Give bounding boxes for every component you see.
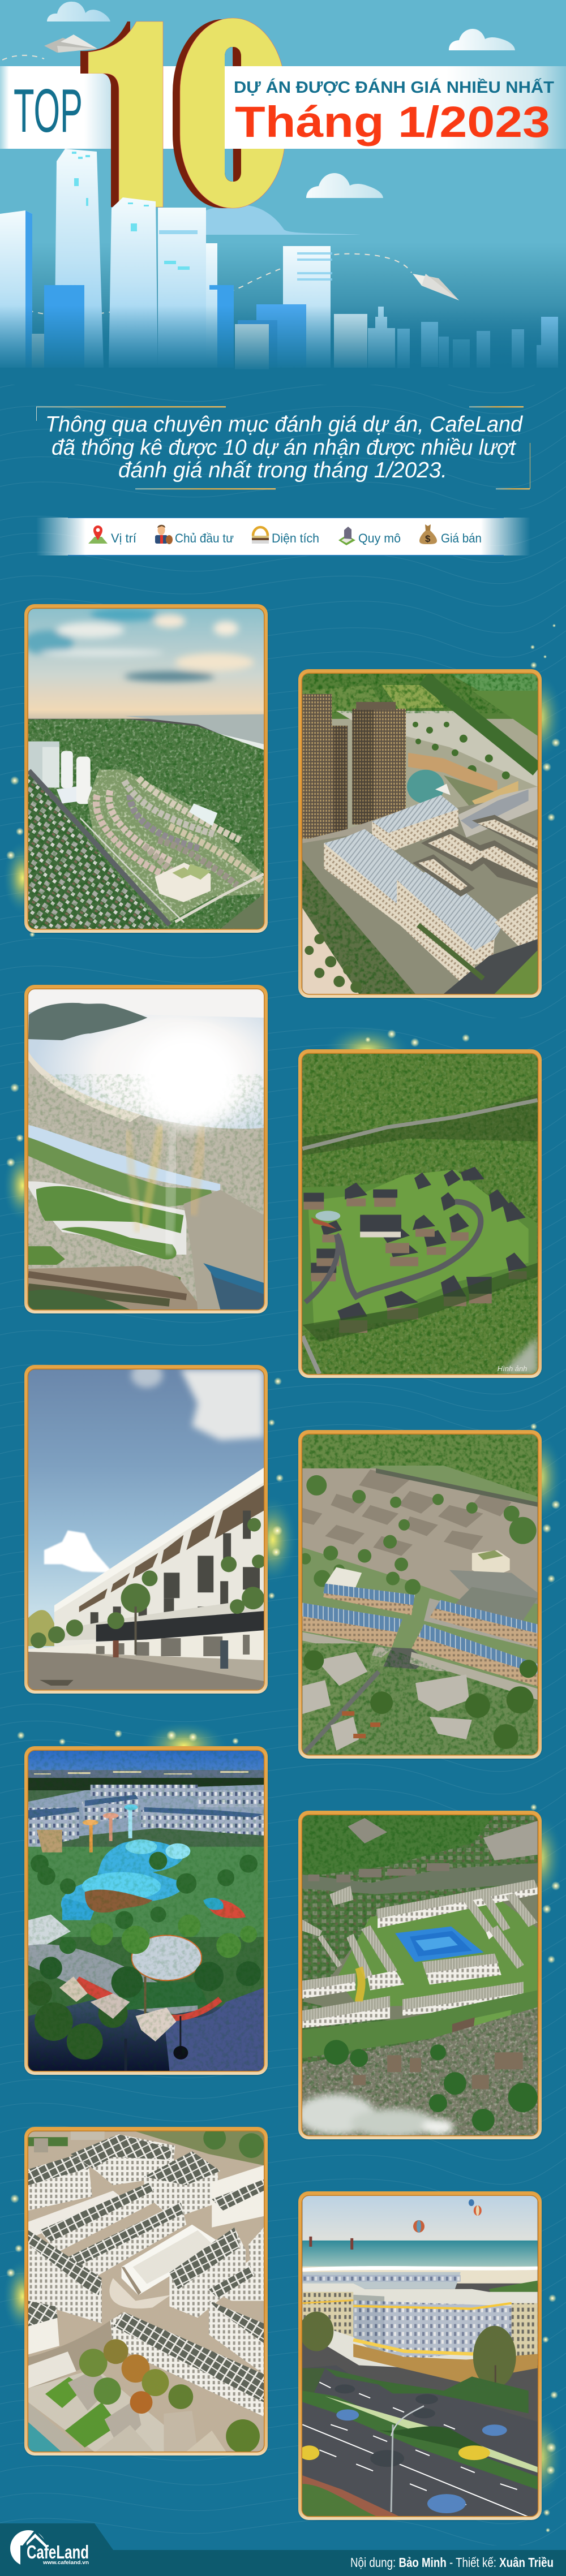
footer bar <box>0 2523 566 2576</box>
legend: developer: Chủ đầu tư <box>175 531 234 545</box>
icon: location pin <box>88 525 108 544</box>
large cloud behind towers <box>206 205 361 235</box>
skyline <box>0 149 558 369</box>
CafeLand logo: www.cafeland.vn <box>42 2560 89 2566</box>
dashed flight paths <box>0 55 411 316</box>
icon: scale <box>338 527 355 545</box>
intro paragraph: đã thống kê được 10 dự án nhận được nhiều lượt <box>52 436 517 460</box>
hot air balloons <box>413 2199 482 2233</box>
panel: project 1 coastal township <box>24 604 268 933</box>
subtitle: DỰ ÁN ĐƯỢC ĐÁNH GIÁ NHIỀU NHẤT <box>234 77 554 97</box>
panel: project 9 shophouse market <box>24 2127 268 2456</box>
legend bar <box>38 518 529 555</box>
legend: price: Giá bán <box>441 531 482 545</box>
panel: project 5 street townhouses <box>24 1365 268 1694</box>
intro paragraph: đánh giá nhất trong tháng 1/2023. <box>118 458 447 483</box>
numeral 0 <box>173 18 285 208</box>
intro text frame <box>36 406 530 490</box>
township <box>88 769 264 922</box>
panel: project 8 market township <box>298 1811 542 2139</box>
panel: project 4 forest villas: Hình ảnh <box>498 1364 527 1373</box>
header illustration <box>0 0 566 385</box>
numeral 1 <box>80 21 163 207</box>
cloud top left <box>47 2 110 21</box>
CafeLand logo: CafeLand <box>27 2541 89 2562</box>
cloud top right <box>449 29 515 50</box>
paper plane left <box>44 35 97 53</box>
TOP label: TOP <box>14 76 83 145</box>
panel: project 6 solar rows <box>298 1430 542 1759</box>
legend: area: Diện tích <box>272 531 319 545</box>
legend: scale: Quy mô <box>358 531 401 545</box>
cloud middle right <box>306 173 383 198</box>
right title band <box>225 66 566 149</box>
legend: location: Vị trí <box>111 531 136 545</box>
intro paragraph <box>45 412 523 483</box>
paper plane right <box>413 274 459 300</box>
intro paragraph: Thông qua chuyên mục đánh giá dự án, CafeLand <box>45 412 523 437</box>
panel: project 10 beachfront boulevard <box>298 2191 542 2520</box>
panel: project 7 night water park <box>24 1746 268 2075</box>
left TOP panel <box>0 66 111 149</box>
panel: project 2 towers and shophouses <box>298 669 542 998</box>
icon: investor <box>155 525 173 544</box>
left band behind the numerals <box>0 66 226 149</box>
month title: Tháng 1/2023 <box>235 98 550 147</box>
icon: area <box>252 527 269 544</box>
icon: money bag <box>419 524 437 544</box>
panel: project 3 golf coast <box>24 985 268 1313</box>
panel: project 4 forest villas <box>298 1049 542 1378</box>
credits: Nội dung: Bảo Minh - Thiết kế: Xuân Triều <box>350 2555 554 2570</box>
icon: money bag: $ <box>425 533 431 544</box>
CafeLand logo <box>10 2530 89 2568</box>
